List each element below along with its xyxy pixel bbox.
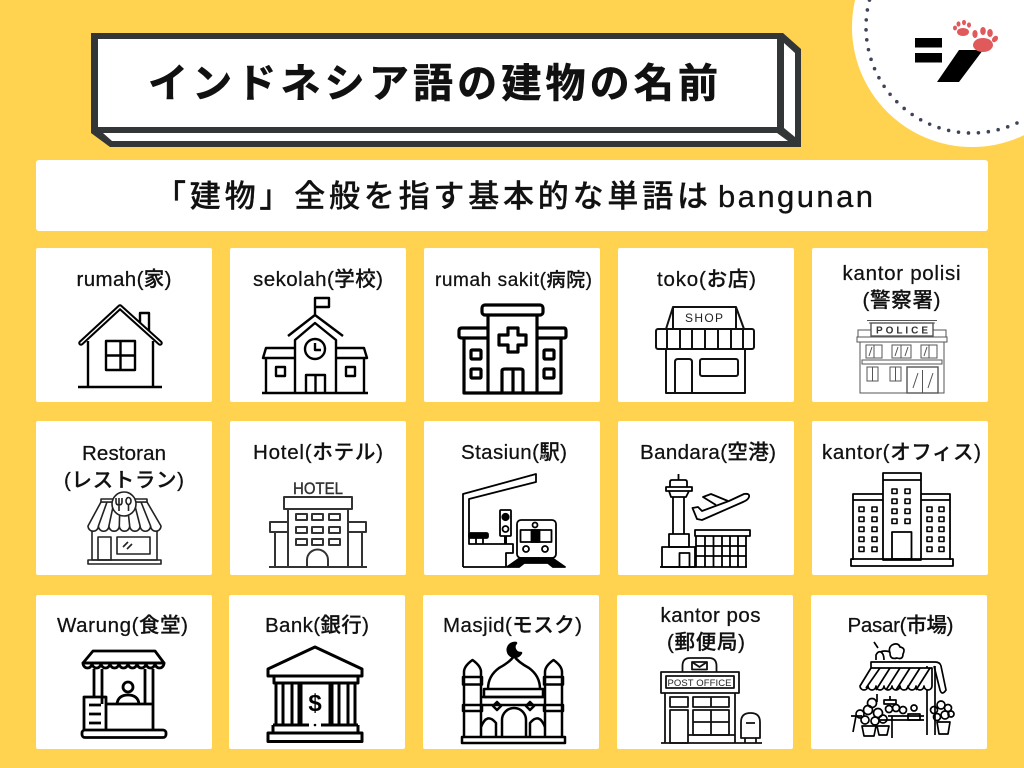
- subtitle panel: 「建物」全般を指す基本的な単語は: [155, 179, 708, 214]
- card: kantor polisi: kantor polisi: [842, 262, 960, 285]
- card: Hotel: Hotel(ホテル): [253, 441, 383, 464]
- logo badge: [852, 0, 1024, 147]
- icon: food stall: [82, 651, 166, 738]
- card: Pasar: Pasar(市場): [848, 614, 954, 637]
- card: Masjid: Masjid(モスク): [443, 614, 582, 637]
- card: Hotel: HOTEL: [293, 479, 343, 498]
- card: kantor pos: (郵便局): [667, 631, 745, 654]
- card: Restoran: (レストラン): [64, 469, 184, 492]
- icon: flower market: [851, 642, 954, 738]
- card: Bandara: Bandara(空港): [640, 441, 776, 464]
- icon: restaurant: [88, 492, 161, 564]
- icon: post office: [661, 658, 762, 743]
- card: kantor pos: [617, 595, 793, 749]
- card: Warung: [36, 595, 212, 749]
- card: Pasar: [811, 595, 987, 749]
- card: rumah: rumah(家): [76, 268, 172, 291]
- icon: bank: [268, 647, 362, 742]
- icon: shop: [656, 307, 754, 393]
- card: Stasiun: [424, 421, 600, 575]
- card: rumah sakit: [424, 248, 600, 402]
- icon: hotel: [269, 497, 367, 567]
- card: Restoran: [36, 421, 212, 575]
- icon: police station: [857, 320, 947, 393]
- icon: station: [463, 474, 565, 567]
- card: toko: toko(お店): [657, 268, 756, 291]
- card: Stasiun: Stasiun(駅): [461, 441, 567, 464]
- card: Bandara: [618, 421, 794, 575]
- title banner: インドネシア語の建物の名前: [148, 62, 718, 106]
- title banner: [91, 33, 801, 147]
- icon: hospital: [459, 305, 566, 393]
- card: Masjid: [423, 595, 599, 749]
- card: Hotel: [230, 421, 406, 575]
- card: kantor: [812, 421, 988, 575]
- icon: school: [262, 298, 368, 393]
- card: kantor: kantor(オフィス): [822, 441, 981, 464]
- card: toko: [618, 248, 794, 402]
- subtitle panel: bangunan: [718, 179, 873, 214]
- card: kantor polisi: (警察署): [862, 289, 940, 312]
- card: Warung: Warung(食堂): [57, 614, 188, 637]
- card: kantor polisi: [812, 248, 988, 402]
- subtitle panel: [36, 160, 988, 231]
- card: sekolah: sekolah(学校): [253, 268, 383, 291]
- icon: mosque: [462, 643, 565, 743]
- icon: house: [78, 307, 162, 387]
- card: Bank: Bank(銀行): [265, 614, 369, 637]
- card: Bank: [229, 595, 405, 749]
- card: toko: SHOP: [685, 311, 723, 325]
- card: rumah sakit: rumah sakit(病院): [435, 269, 592, 291]
- card: rumah: [36, 248, 212, 402]
- card: Restoran: Restoran: [82, 442, 166, 465]
- icon: airport: [660, 474, 750, 567]
- card: kantor polisi: POLICE: [876, 326, 928, 336]
- card: kantor pos: kantor pos: [660, 604, 760, 627]
- card: sekolah: [230, 248, 406, 402]
- card: kantor pos: POST OFFICE: [668, 678, 732, 689]
- icon: office: [851, 473, 953, 566]
- card: Bank: $: [308, 690, 322, 717]
